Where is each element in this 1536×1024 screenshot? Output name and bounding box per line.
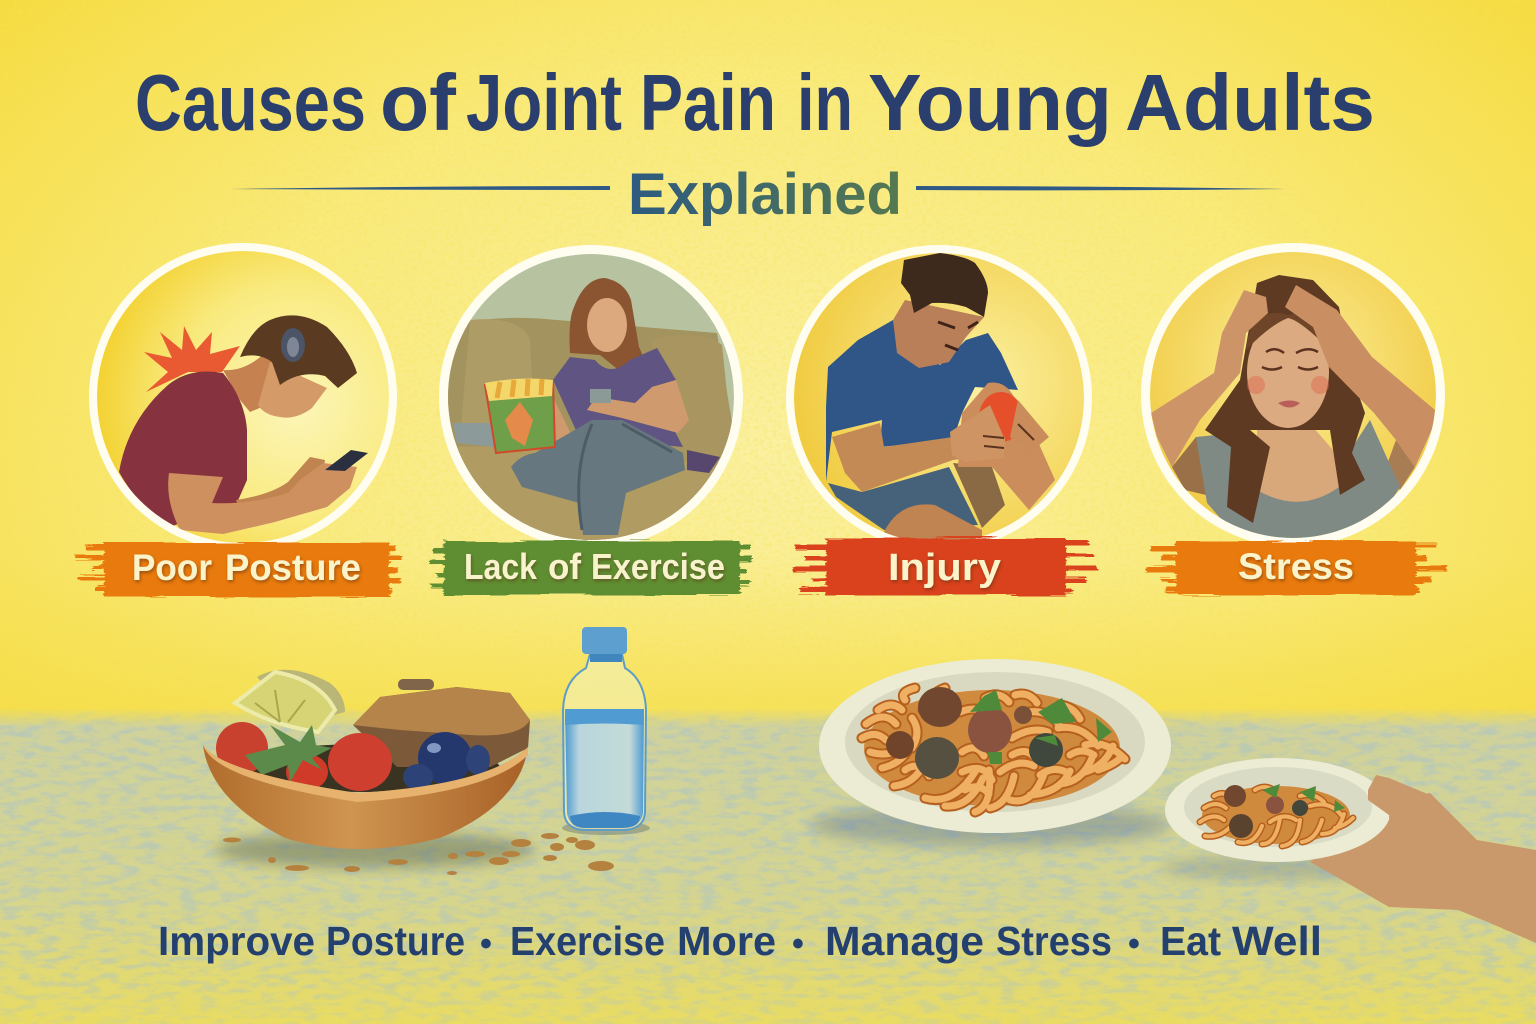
panel: lack of exercise bbox=[439, 245, 743, 550]
label: Injury bbox=[793, 538, 1098, 595]
pasta bbox=[862, 688, 1125, 812]
closing tips: • bbox=[1128, 925, 1140, 963]
title: of bbox=[380, 58, 456, 147]
closing tips: More bbox=[677, 918, 776, 964]
label: Poor Posture: Poor bbox=[132, 547, 212, 588]
label: Lack of Exercise: of bbox=[548, 546, 582, 587]
icon: small plate of pasta bbox=[1165, 758, 1391, 862]
label: Poor Posture: Posture bbox=[225, 547, 361, 588]
illustration: woman on a couch bbox=[445, 254, 740, 550]
closing tips: Well bbox=[1232, 918, 1322, 964]
icon: hand under plate bbox=[1310, 793, 1536, 943]
subtitle with rules bbox=[230, 162, 1285, 227]
closing tips: • bbox=[792, 925, 804, 963]
label: Poor Posture bbox=[75, 543, 402, 597]
closing tips: Manage bbox=[825, 918, 984, 964]
label: Lack of Exercise: Lack bbox=[464, 546, 538, 587]
title: Adults bbox=[1125, 58, 1375, 147]
illustration: man's head bbox=[893, 253, 988, 368]
panel: poor posture bbox=[89, 243, 397, 551]
panel: injury bbox=[786, 245, 1092, 551]
panel: stress bbox=[1141, 243, 1445, 547]
strawberries bbox=[216, 722, 392, 791]
label: Injury: Injury bbox=[888, 547, 1001, 589]
closing tips: Eat bbox=[1160, 918, 1221, 964]
table surface bbox=[0, 708, 1536, 1024]
label: Stress bbox=[1146, 541, 1446, 595]
bowl body bbox=[203, 745, 528, 849]
icon: thumb over plate bbox=[1368, 775, 1430, 830]
subtitle with rules: Explained bbox=[628, 162, 902, 227]
closing tips: • bbox=[480, 925, 492, 963]
icon: large plate of pasta bbox=[819, 659, 1171, 833]
label: Lack of Exercise: Exercise bbox=[591, 546, 725, 587]
closing tips: Posture bbox=[326, 918, 465, 964]
title: Young bbox=[868, 58, 1112, 147]
illustration: woman holding her head bbox=[1150, 252, 1436, 545]
icon: scattered seeds bbox=[223, 833, 614, 875]
label: Stress: Stress bbox=[1238, 546, 1354, 587]
title: Pain bbox=[640, 58, 776, 147]
bread loaf bbox=[353, 687, 530, 767]
closing tips bbox=[158, 918, 1322, 964]
title: in bbox=[797, 58, 853, 147]
plums bbox=[403, 732, 490, 790]
meatballs and herbs bbox=[886, 687, 1112, 779]
label: Lack of Exercise bbox=[430, 541, 752, 595]
lemon and melon bbox=[235, 670, 434, 732]
icon: bowl of fruit and bread bbox=[203, 670, 535, 868]
illustration: man holding knee bbox=[794, 253, 1084, 545]
closing tips: Improve bbox=[158, 918, 315, 964]
closing tips: Stress bbox=[996, 918, 1112, 964]
closing tips: Exercise bbox=[510, 918, 665, 964]
title: Joint bbox=[466, 58, 622, 147]
bowl rim bbox=[203, 745, 528, 802]
title bbox=[135, 58, 1375, 147]
icon: water bottle bbox=[562, 627, 650, 835]
bowl interior shadow bbox=[230, 744, 500, 792]
title: Causes bbox=[135, 58, 366, 147]
illustration: man bent over phone bbox=[97, 251, 389, 543]
